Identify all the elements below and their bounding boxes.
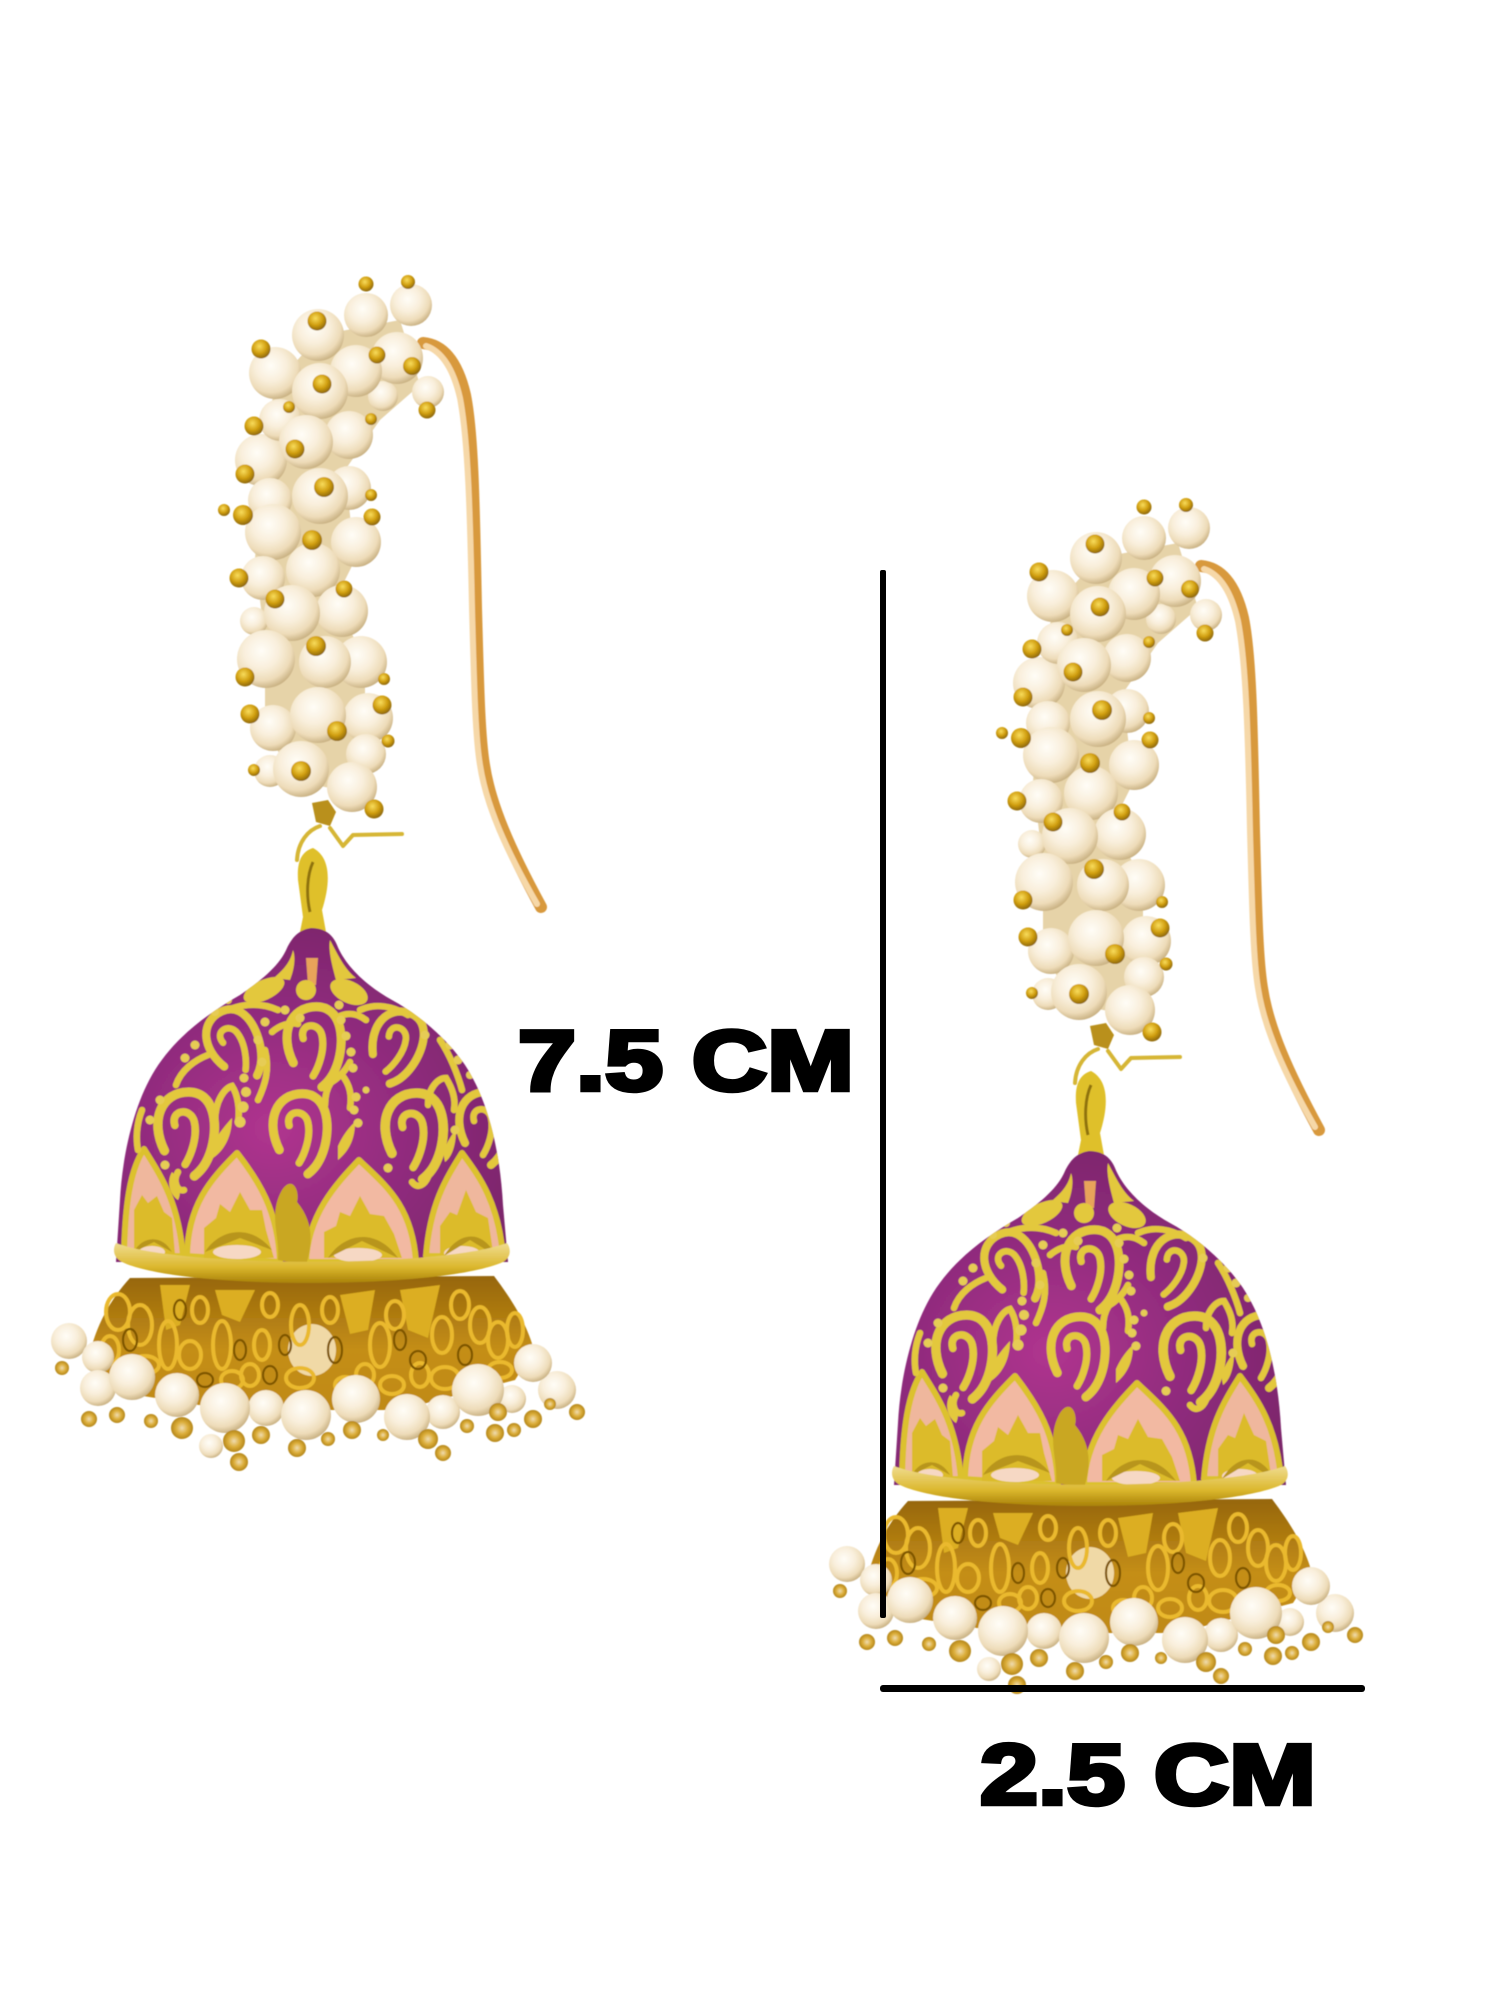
- infographic canvas: [50, 274, 1365, 1808]
- leaf accents: [169, 1118, 456, 1200]
- pearl fringe: [51, 1323, 585, 1471]
- width dimension line: [880, 1685, 1365, 1692]
- gold drops: [55, 1361, 585, 1471]
- dotted columns: [146, 996, 474, 1172]
- scroll accents: [137, 1005, 462, 1190]
- pearl cluster: [235, 284, 444, 812]
- centre seam: [275, 1184, 311, 1265]
- dome ornament clipped to outline: [124, 940, 509, 1265]
- earring: right jhumka: [829, 498, 1363, 1694]
- dome: [116, 928, 509, 1265]
- earring: left jhumka: [51, 275, 585, 1471]
- gold rim: [114, 1243, 510, 1283]
- width label: 2.5 CM: [980, 1728, 1316, 1823]
- gold bead caps: [218, 275, 436, 818]
- gold chain fringe: [88, 1276, 534, 1410]
- gold petal motifs: [134, 1190, 494, 1258]
- hook wire: [423, 343, 541, 907]
- wire loop and bail: [297, 800, 402, 932]
- chain rings: [101, 1291, 523, 1394]
- height dimension line: [880, 570, 886, 1618]
- height label: 7.5 CM: [518, 1014, 854, 1109]
- neck decoration: [240, 940, 372, 1010]
- paisley motifs: [158, 1092, 214, 1176]
- peach petal band: [124, 1149, 503, 1262]
